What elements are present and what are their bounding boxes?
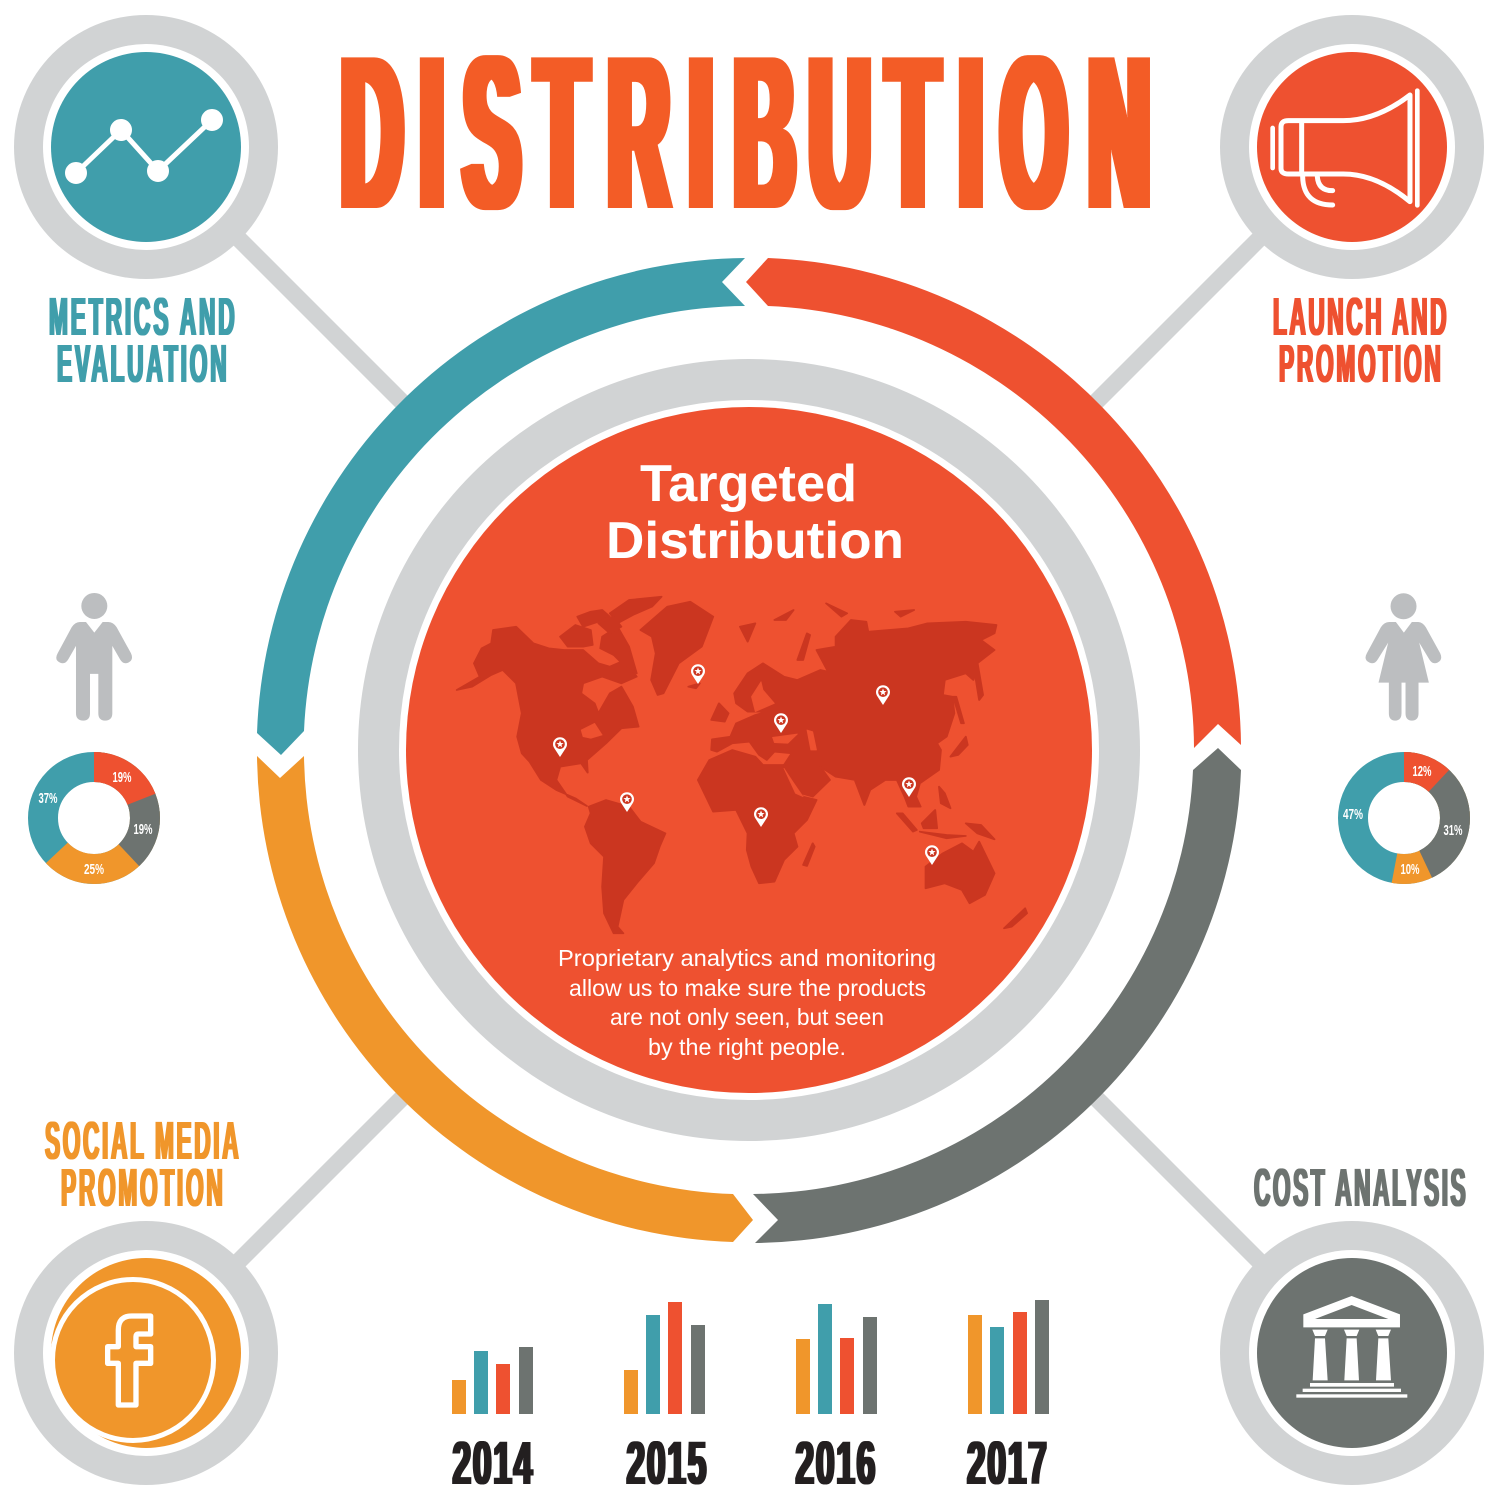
year labels: 2016 <box>796 1429 875 1498</box>
cycle ring: launch arc <box>746 258 1241 748</box>
label: metrics and evaluation: METRICS AND <box>49 287 235 347</box>
donut chart: women: 12% <box>1412 763 1432 780</box>
label: social media promotion: SOCIAL MEDIA <box>45 1111 239 1171</box>
map pin: north america <box>553 737 567 757</box>
connector lines <box>200 200 1298 1300</box>
label: social media promotion: PROMOTION <box>61 1158 223 1218</box>
icon: facebook f <box>108 1316 151 1405</box>
bar chart: 2014 <box>452 1347 533 1414</box>
map pin: russia <box>876 685 890 705</box>
icon: man <box>56 593 132 721</box>
map seas <box>581 682 817 797</box>
title: DISTRIBUTION <box>341 11 1150 256</box>
icon: woman <box>1366 593 1441 721</box>
world map <box>457 597 1027 933</box>
description text: by the right people. <box>648 1034 846 1060</box>
year labels: 2014 <box>452 1429 533 1498</box>
label: launch and promotion: LAUNCH AND <box>1273 287 1446 347</box>
map pin: southeast asia <box>902 777 916 797</box>
label: metrics and evaluation <box>49 287 235 394</box>
description text: allow us to make sure the products <box>569 975 926 1001</box>
panel: targeted distribution circle <box>358 359 1140 1141</box>
label: launch and promotion: PROMOTION <box>1279 334 1441 394</box>
heading: targeted distribution <box>606 455 904 570</box>
description text: Proprietary analytics and monitoring <box>558 945 936 971</box>
bar chart: 2017 <box>968 1300 1049 1414</box>
heading: targeted distribution: Targeted <box>640 455 857 513</box>
badge: launch <box>1220 15 1484 279</box>
label: metrics and evaluation: EVALUATION <box>57 334 227 394</box>
donut chart: women: 47% <box>1343 806 1363 823</box>
year labels: 2015 <box>626 1429 706 1498</box>
year labels: 2017 <box>967 1429 1047 1498</box>
cycle ring: cost arc <box>753 748 1241 1243</box>
map pin: europe <box>774 713 788 733</box>
description text: are not only seen, but seen <box>610 1004 884 1030</box>
bar chart: 2016 <box>796 1304 877 1414</box>
badge: metrics <box>14 15 278 279</box>
donut chart: men <box>38 767 152 878</box>
label: cost analysis: COST ANALYSIS <box>1254 1158 1466 1218</box>
donut chart: women: 31% <box>1444 822 1462 839</box>
label: social media promotion <box>45 1111 239 1218</box>
badge: cost <box>1220 1221 1484 1485</box>
cycle ring: metrics arc <box>257 258 745 755</box>
map pin: australia <box>925 845 939 865</box>
icon: line chart <box>66 110 222 184</box>
donut chart: men: 19% <box>134 821 152 838</box>
description text <box>558 945 936 1060</box>
map pin: africa <box>754 807 768 827</box>
donut chart: women: 10% <box>1400 861 1420 878</box>
donut chart: men: 37% <box>38 790 58 807</box>
heading: targeted distribution: Distribution <box>606 512 904 570</box>
donut chart: women <box>1343 763 1462 878</box>
donut chart: men: 25% <box>84 861 104 878</box>
map pin: iceland <box>691 664 705 684</box>
cycle ring: social arc <box>257 756 753 1242</box>
map pin: south america <box>620 792 634 812</box>
donut chart: men: 19% <box>112 769 132 786</box>
icon: bank building <box>1296 1296 1407 1398</box>
badge: social media <box>14 1221 278 1485</box>
bar chart: 2015 <box>624 1302 705 1414</box>
icon: megaphone <box>1273 91 1417 205</box>
label: launch and promotion <box>1273 287 1446 394</box>
year labels <box>452 1429 1047 1498</box>
